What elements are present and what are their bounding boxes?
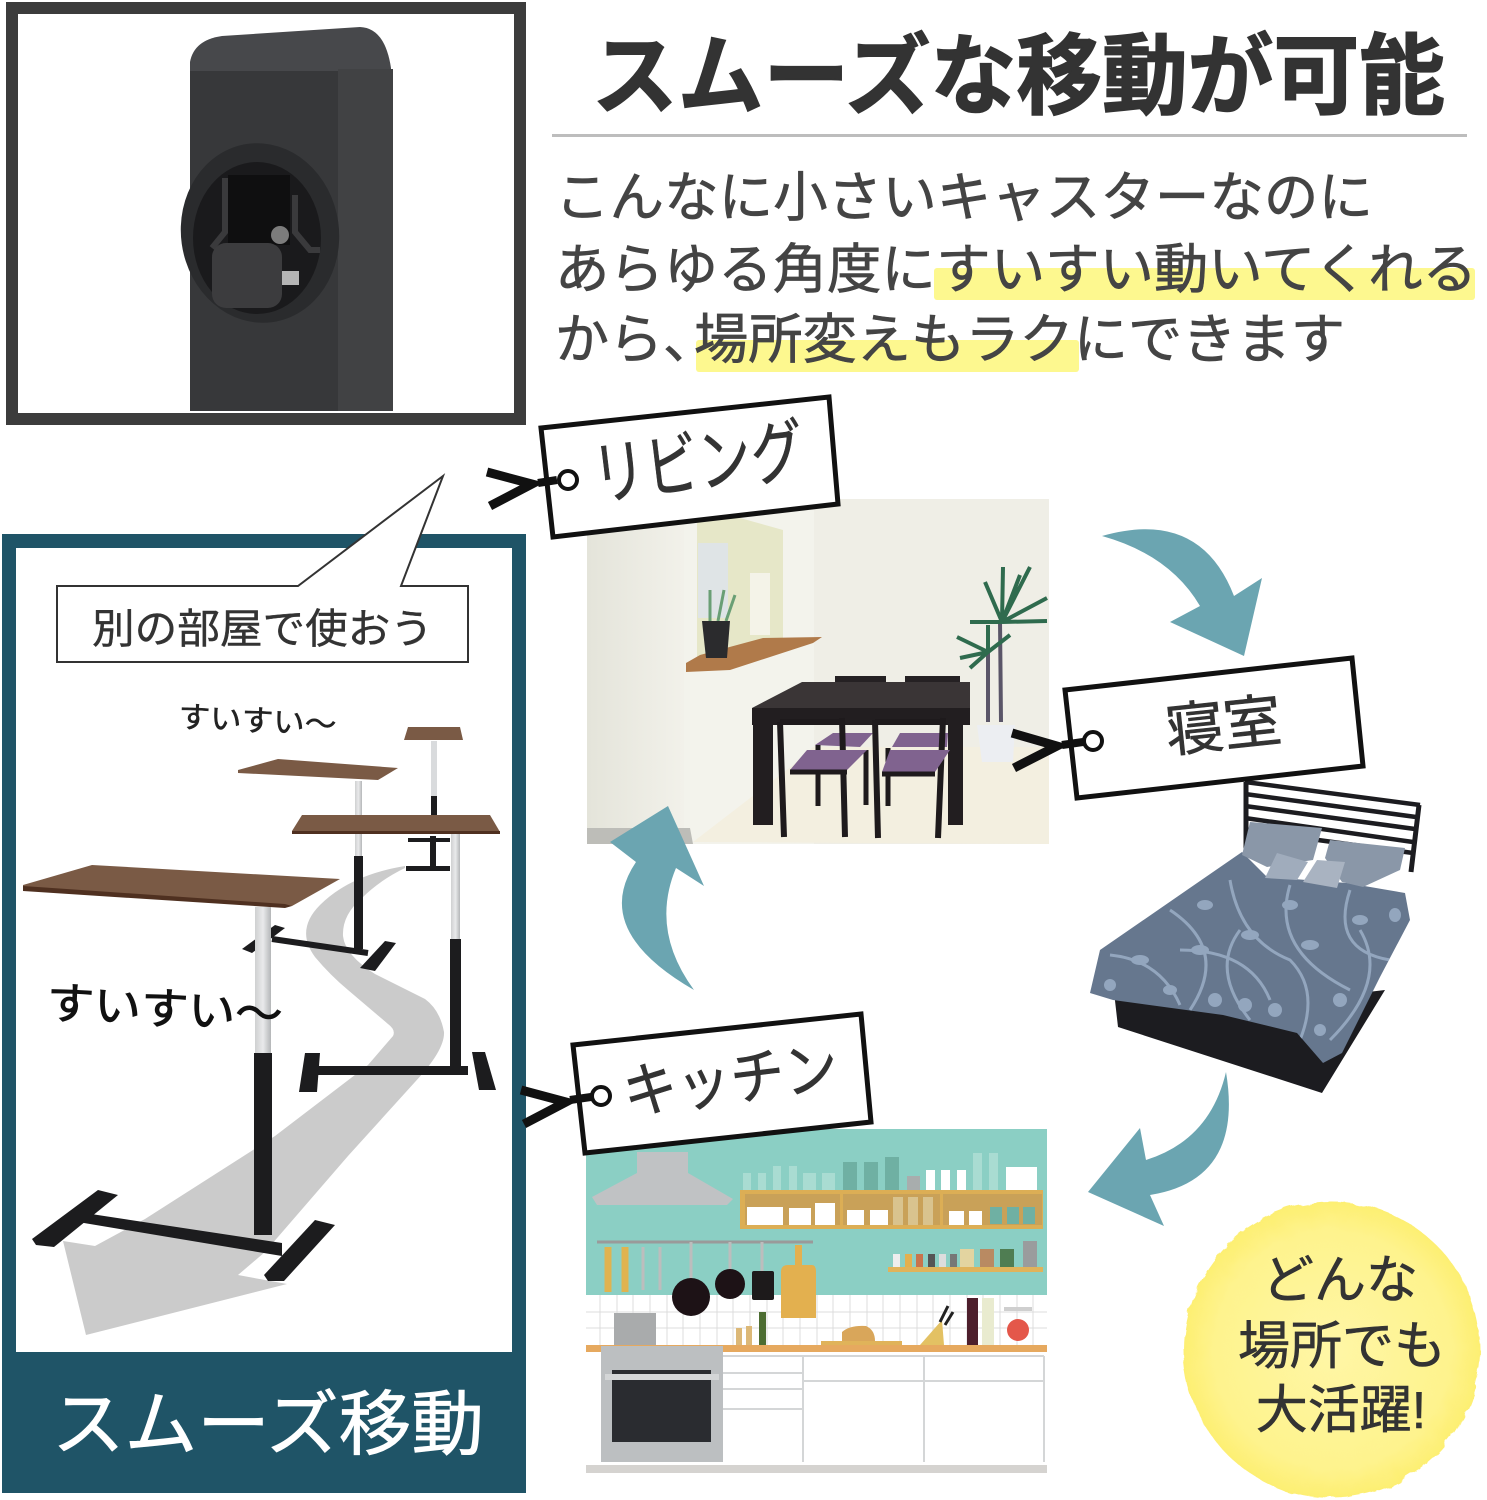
tag: bedroom bbox=[1012, 658, 1363, 798]
tag: living: リビング bbox=[588, 412, 808, 515]
text block: description: から、 bbox=[555, 310, 717, 370]
cabinets bbox=[723, 1356, 1044, 1462]
range hood bbox=[592, 1152, 733, 1205]
tag: kitchen bbox=[521, 1014, 871, 1153]
title underline bbox=[552, 134, 1467, 137]
counter bbox=[586, 1345, 1047, 1352]
speech bubble text: 別の部屋で使おう bbox=[92, 606, 433, 652]
counter items bbox=[614, 1298, 1032, 1346]
callout: useful anywhere: 大活躍! bbox=[1256, 1382, 1426, 1440]
callout: useful anywhere: 場所でも bbox=[1238, 1318, 1446, 1376]
text block: description bbox=[555, 168, 1477, 372]
arrow: bedroom to kitchen bbox=[1088, 1072, 1229, 1226]
table third bbox=[292, 815, 500, 1092]
arrow: kitchen to living bbox=[610, 806, 704, 990]
table front bbox=[23, 865, 340, 1281]
tag: bedroom: 寝室 bbox=[1163, 688, 1285, 765]
small shelf bbox=[888, 1241, 1043, 1272]
panel: smooth movement bbox=[2, 476, 526, 1493]
handwriting small: すいすい〜 bbox=[178, 701, 337, 742]
text block: description: こんなに小さいキャスターなのに bbox=[555, 168, 1373, 228]
title: スムーズな移動が可能 bbox=[592, 27, 1445, 126]
panel band bbox=[2, 1352, 526, 1493]
tag: kitchen: キッチン bbox=[619, 1034, 842, 1127]
text block: description: 場所変えもラクにできます bbox=[694, 310, 1345, 370]
table far bbox=[404, 727, 463, 871]
floor path bbox=[63, 866, 444, 1335]
photo: kitchen bbox=[586, 1129, 1047, 1473]
photo: bed bbox=[1090, 782, 1420, 1093]
callout: useful anywhere bbox=[1184, 1202, 1480, 1498]
panel band label: スムーズ移動 bbox=[52, 1386, 484, 1465]
tiles bbox=[586, 1295, 1047, 1345]
shelf bbox=[740, 1153, 1043, 1229]
photo: living room bbox=[587, 499, 1049, 844]
oven bbox=[601, 1346, 723, 1462]
photo: caster close-up bbox=[12, 8, 520, 419]
utensils bbox=[597, 1242, 816, 1318]
speech bubble bbox=[57, 476, 468, 662]
callout: useful anywhere: どんな bbox=[1262, 1252, 1418, 1310]
tag: living bbox=[487, 397, 838, 537]
arrow: living to bedroom bbox=[1102, 529, 1262, 656]
table second bbox=[238, 759, 398, 971]
text block: description: あらゆる角度にすいすい動いてくれる bbox=[555, 240, 1477, 300]
handwriting large: すいすい〜 bbox=[45, 979, 284, 1040]
